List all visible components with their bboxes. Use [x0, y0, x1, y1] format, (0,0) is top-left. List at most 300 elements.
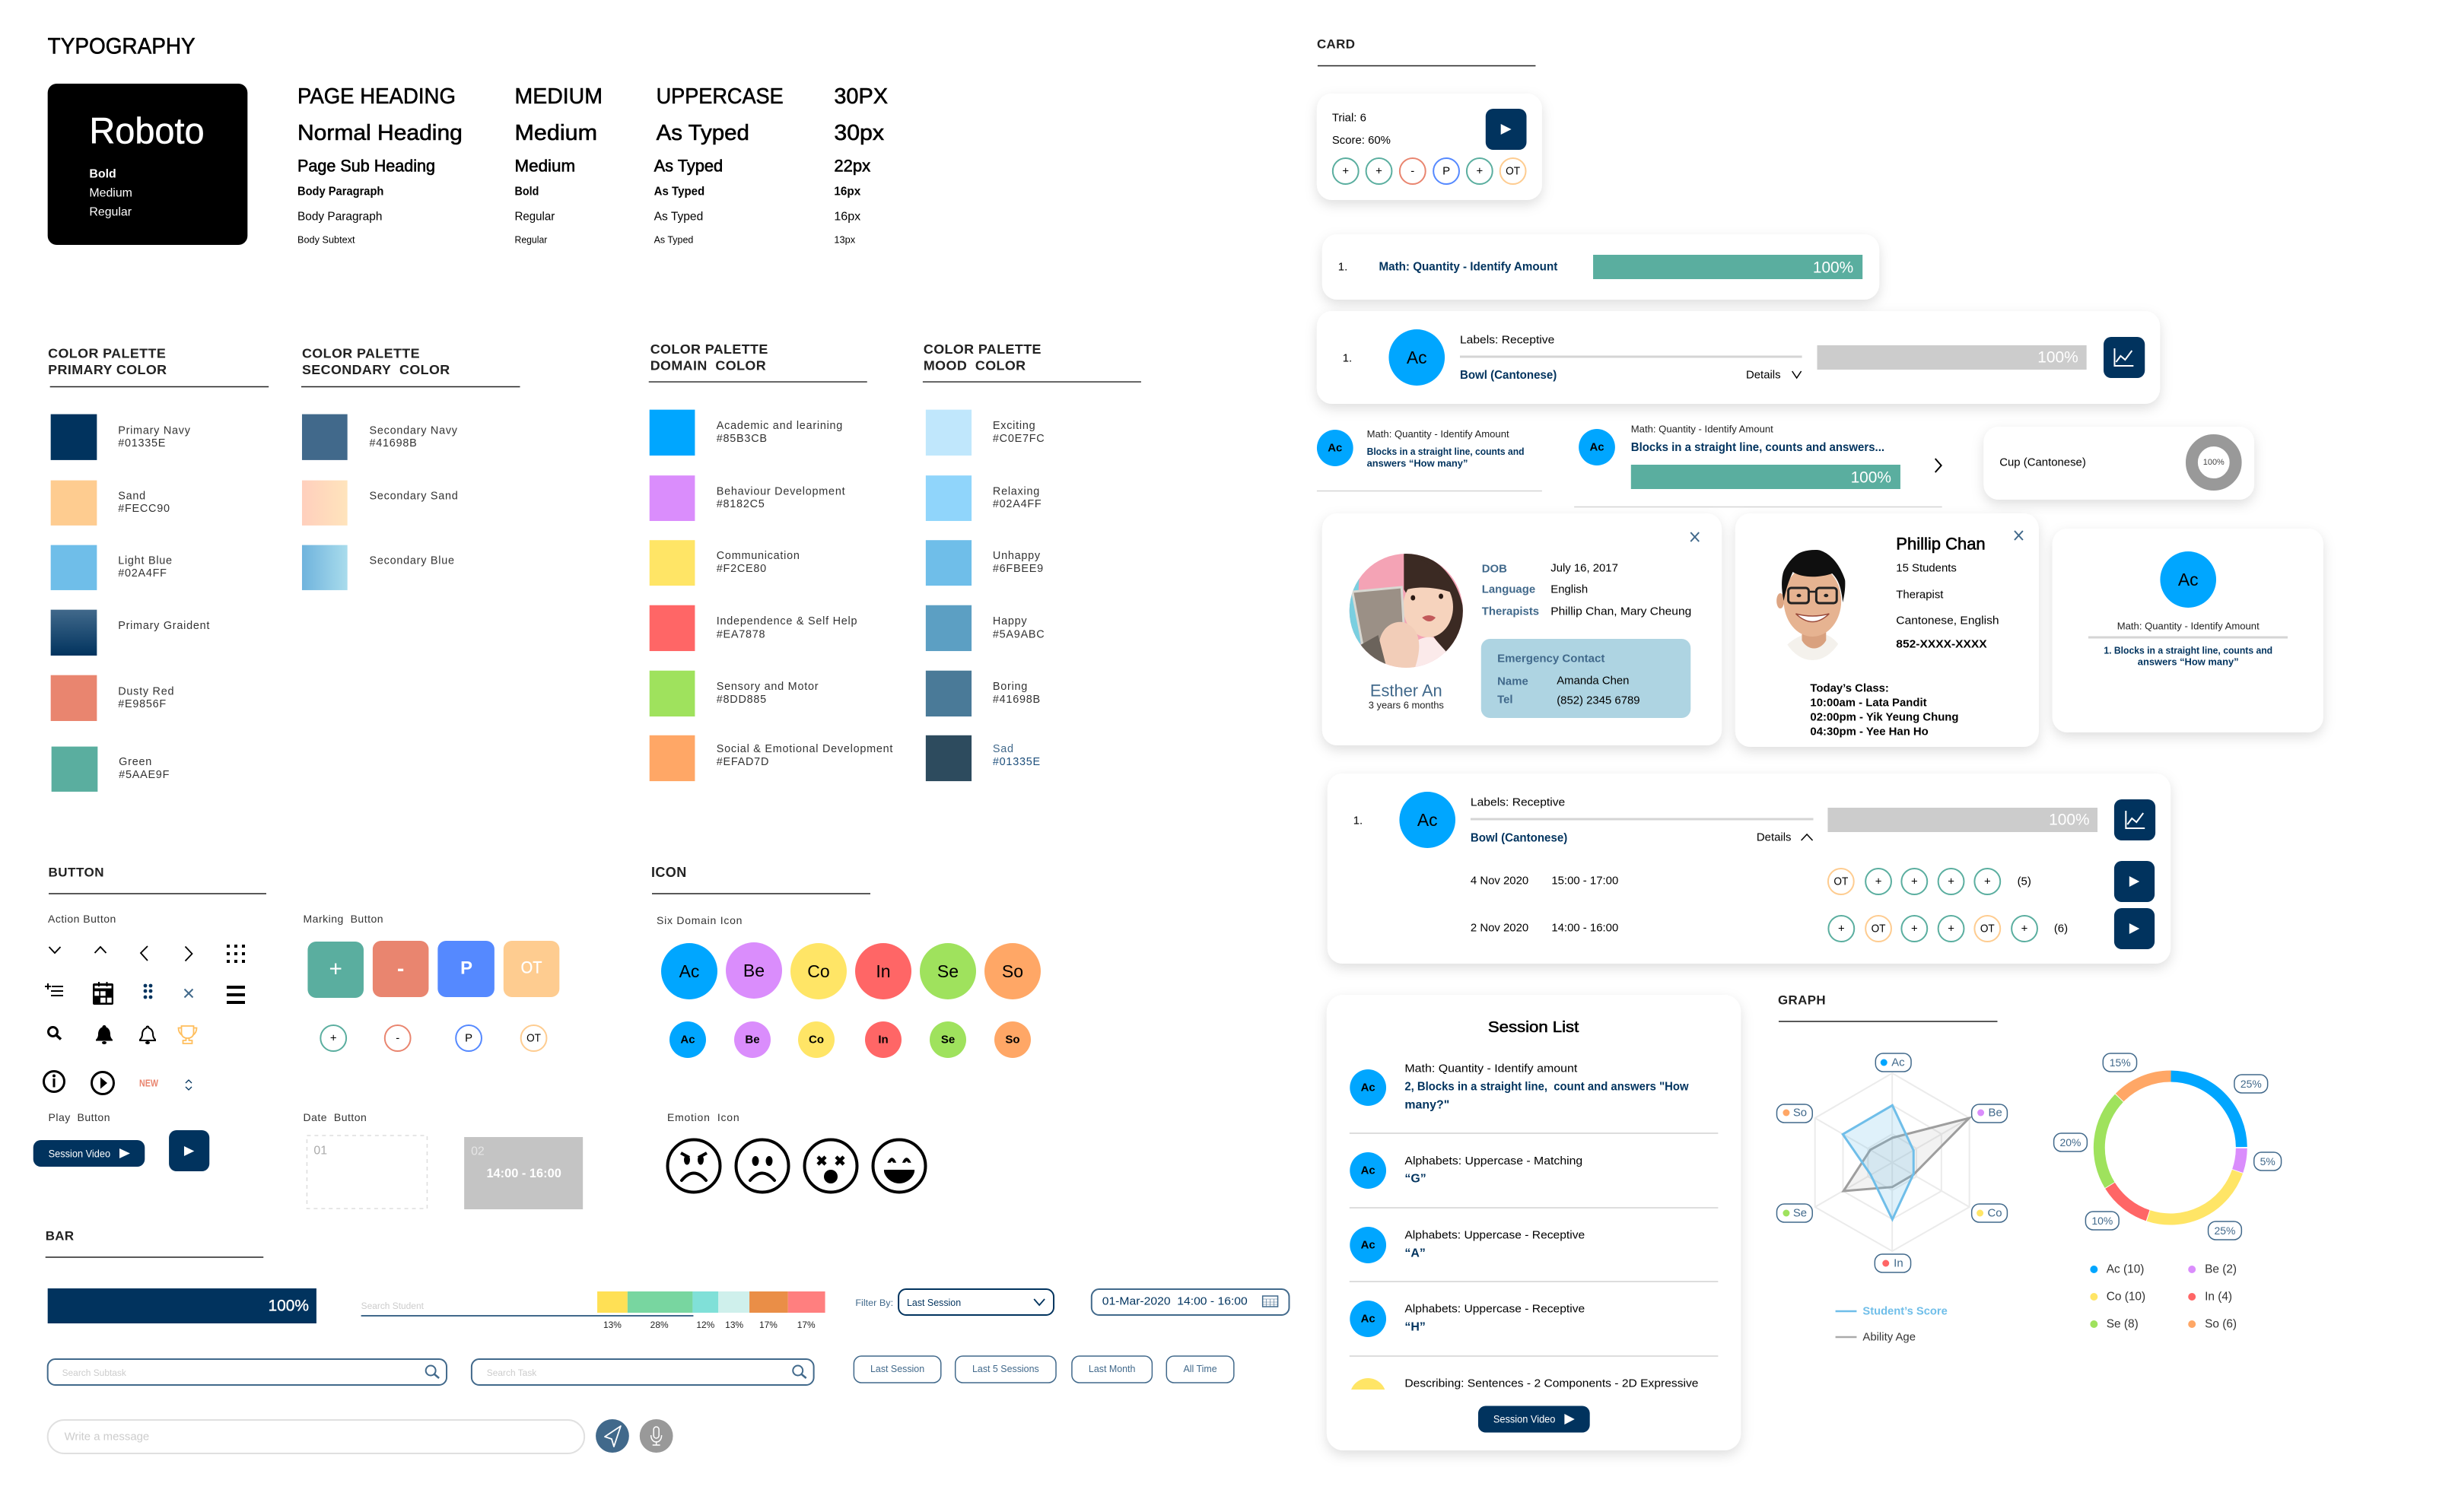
time filter pills — [854, 1356, 1234, 1383]
panel: primary colour palette: #01335E — [118, 437, 166, 449]
card: domain task vertical — [2053, 529, 2323, 732]
label: marking button: Marking Button — [303, 913, 383, 925]
marking buttons small: - — [396, 1031, 399, 1045]
session row 1: (5) — [2018, 875, 2031, 888]
session list title: Session List — [1488, 1019, 1579, 1036]
card: task progress: 1. — [1338, 260, 1347, 274]
emergency contact box: (852) 2345 6789 — [1557, 694, 1640, 707]
panel: primary colour palette: Primary Graident — [118, 620, 210, 632]
card: domain task vertical: answers “How many” — [2138, 656, 2239, 668]
emergency contact box: Name — [1497, 675, 1528, 688]
card: expanded label details: Ac — [1417, 810, 1438, 830]
date button filled — [464, 1137, 583, 1209]
domain icons small: Be — [745, 1033, 760, 1047]
marking buttons small: + — [330, 1031, 337, 1045]
type scale table: Bold — [515, 185, 539, 199]
label: action button: Action Button — [48, 913, 116, 925]
radar labels: In — [1894, 1256, 1903, 1270]
list item 3 — [1350, 1227, 1718, 1282]
section: bar — [46, 1228, 1289, 1453]
card: task item flat: answers “How many” — [1367, 457, 1468, 469]
radar labels: Ac — [1891, 1056, 1905, 1069]
today's class list — [1810, 681, 1959, 739]
panel: primary colour palette: Light Blue — [118, 554, 173, 567]
card: expanded label details: Details — [1757, 831, 1792, 844]
list item 2 — [1350, 1152, 1718, 1208]
message input — [48, 1420, 584, 1453]
panel: domain colour palette: COLOR PALETTE — [650, 341, 768, 357]
type scale table: As Typed — [654, 156, 723, 176]
stacked bar: 17% — [759, 1320, 778, 1330]
donut percentage labels: 5% — [2260, 1155, 2275, 1167]
card: task item with bar — [1574, 423, 1942, 507]
font card: Roboto — [48, 84, 247, 245]
panel: secondary colour palette: SECONDARY COLOR — [302, 362, 450, 377]
panel: mood colour palette: Boring — [993, 681, 1028, 693]
card: trial score — [1317, 94, 1542, 200]
panel: secondary colour palette: Secondary Navy — [370, 424, 458, 437]
icon: angry face — [668, 1139, 720, 1193]
domain icons small — [669, 1021, 1031, 1058]
today's class list: 02:00pm - Yik Yeung Chung — [1810, 710, 1959, 724]
radar legend: Student’s Score — [1862, 1304, 1948, 1318]
domain icons small: In — [878, 1033, 889, 1047]
search task input — [472, 1359, 814, 1385]
photo: child with phone — [1350, 554, 1463, 668]
domain icons small: So — [1005, 1033, 1020, 1047]
heading: graph: GRAPH — [1778, 993, 1826, 1008]
student details: Therapists — [1482, 605, 1539, 618]
heading: card: CARD — [1317, 37, 1355, 52]
panel: primary colour palette: Dusty Red — [118, 685, 174, 697]
panel: mood colour palette: #01335E — [993, 756, 1041, 768]
card: student profile: 3 years 6 months — [1369, 699, 1444, 711]
stacked bar: 13% — [603, 1320, 622, 1330]
icon: send button — [596, 1419, 629, 1453]
marking buttons small: P — [465, 1031, 472, 1045]
card: task progress: Math: Quantity - Identify Amount — [1379, 260, 1558, 274]
therapist details: 852-XXXX-XXXX — [1896, 637, 1987, 651]
session row 2: (6) — [2054, 922, 2068, 935]
list item 2: Alphabets: Uppercase - Matching — [1404, 1155, 1582, 1167]
domain icons large: Be — [743, 961, 765, 980]
type scale table: As Typed — [654, 185, 704, 199]
panel: mood colour palette: #5A9ABC — [993, 628, 1045, 640]
font card: Roboto: Regular — [89, 205, 132, 219]
list item 3: Alphabets: Uppercase - Receptive — [1404, 1228, 1585, 1242]
panel: mood colour palette: #02A4FF — [993, 498, 1042, 510]
time filter pills: Last Month — [1089, 1364, 1135, 1374]
label: emotion icon: Emotion Icon — [667, 1111, 739, 1123]
panel: secondary colour palette: #41698B — [370, 437, 417, 449]
marking buttons large: - — [397, 956, 404, 980]
list item 1 — [1350, 1062, 1718, 1133]
card: label progress: Labels: Receptive — [1460, 333, 1554, 347]
icon: close — [2015, 531, 2023, 540]
donut legend: Se (8) — [2107, 1317, 2139, 1331]
type scale table: 22px — [834, 156, 870, 176]
panel: domain colour palette — [649, 341, 893, 781]
stacked bar — [597, 1291, 825, 1330]
heading: typography: TYPOGRAPHY — [48, 33, 196, 59]
font card: Roboto: Medium — [89, 186, 132, 200]
icon: sort chevrons — [186, 1080, 192, 1090]
button: play square — [169, 1130, 209, 1171]
heading: button: BUTTON — [49, 866, 104, 879]
session row 2: + — [1911, 922, 1918, 935]
date button empty: 01 — [313, 1144, 327, 1158]
card: task item with bar: Blocks in a straight line, counts and answers... — [1631, 441, 1884, 454]
today's class list: 04:30pm - Yee Han Ho — [1810, 725, 1929, 739]
card: label progress: Details — [1746, 368, 1781, 382]
card: student profile — [1322, 513, 1722, 745]
panel: domain colour palette: #F2CE80 — [717, 563, 767, 575]
section: button — [33, 866, 583, 1209]
marking buttons small — [320, 1025, 546, 1051]
session row 2: + — [1838, 922, 1845, 935]
card: expanded label details — [1328, 773, 2171, 964]
icon: laughing face — [873, 1139, 925, 1193]
stacked bar: 28% — [650, 1320, 669, 1330]
heading: icon: ICON — [651, 865, 687, 880]
section: icon — [651, 865, 1041, 1193]
radar labels: So — [1793, 1106, 1807, 1120]
panel: domain colour palette: Communication — [717, 550, 800, 562]
emergency contact box: Tel — [1497, 693, 1513, 707]
list item 4: “H” — [1404, 1320, 1426, 1334]
radar chart — [1776, 1053, 2007, 1344]
marking buttons large: OT — [521, 958, 542, 977]
icon: hamburger — [227, 986, 245, 1004]
card: trial score: Score: 60% — [1332, 134, 1391, 147]
card: domain task vertical: Ac — [2178, 570, 2199, 589]
card: therapist profile — [1735, 513, 2039, 747]
student details: Language — [1482, 583, 1535, 596]
emergency contact box — [1481, 639, 1690, 718]
icon: drag handle — [144, 984, 152, 999]
today's class list: 10:00am - Lata Pandit — [1810, 696, 1927, 710]
donut legend: Be (2) — [2205, 1263, 2237, 1276]
panel: mood colour palette: MOOD COLOR — [924, 357, 1026, 373]
date button filled: 14:00 - 16:00 — [486, 1167, 561, 1180]
list item 5 clipped: Describing: Sentences - 2 Components - 2D Expressive — [1404, 1377, 1698, 1390]
panel: secondary colour palette — [301, 346, 520, 590]
list item 4: Ac — [1361, 1312, 1375, 1326]
panel: domain colour palette: Social & Emotional Development — [717, 743, 893, 755]
type scale table: Medium — [515, 156, 575, 176]
panel: domain colour palette: #8182C5 — [717, 498, 765, 510]
button: session video — [1478, 1406, 1590, 1433]
panel: primary colour palette: Primary Navy — [118, 424, 191, 437]
panel: secondary colour palette: COLOR PALETTE — [302, 346, 420, 361]
radar labels — [1776, 1053, 2007, 1272]
type scale table: Body Paragraph — [297, 210, 382, 224]
card: task progress — [1322, 234, 1879, 300]
panel: domain colour palette: DOMAIN COLOR — [650, 357, 766, 373]
donut legend — [2090, 1263, 2237, 1331]
domain icons large: In — [876, 961, 891, 981]
type scale table: MEDIUM — [515, 84, 603, 109]
date range input: 01-Mar-2020 14:00 - 16:00 — [1102, 1294, 1248, 1308]
card: expanded label details: Labels: Receptive — [1471, 796, 1565, 809]
panel: domain colour palette: Independence & Self Help — [717, 615, 857, 627]
session row 2: 2 Nov 2020 — [1471, 921, 1528, 935]
panel: primary colour palette: #E9856F — [118, 698, 167, 710]
stacked bar: 13% — [725, 1320, 743, 1330]
card: task item with bar: Ac — [1589, 440, 1604, 454]
card: label progress: Ac — [1407, 348, 1427, 367]
stacked bar: 12% — [696, 1320, 715, 1330]
card: cup donut: Cup (Cantonese) — [1999, 456, 2086, 469]
section: typography — [48, 33, 888, 246]
icon: info — [44, 1071, 64, 1092]
domain icons large — [661, 942, 1041, 999]
time filter pills: Last 5 Sessions — [972, 1364, 1039, 1374]
session row 2: OT — [1980, 922, 1995, 935]
emergency contact box: Emergency Contact — [1497, 652, 1604, 665]
type scale table: 16px — [834, 210, 860, 224]
donut percentage labels: 10% — [2091, 1215, 2113, 1227]
radar legend: Ability Age — [1862, 1330, 1916, 1344]
panel: mood colour palette: COLOR PALETTE — [924, 341, 1042, 357]
type scale table: Page Sub Heading — [297, 156, 435, 176]
panel: domain colour palette: Behaviour Development — [717, 485, 845, 497]
card: task item flat — [1317, 428, 1542, 491]
list item 2: “G” — [1404, 1172, 1426, 1186]
date button filled: 02 — [471, 1145, 485, 1158]
card: trial score: P — [1442, 164, 1450, 178]
marking buttons large: P — [460, 958, 472, 979]
label: play button: Play Button — [49, 1111, 110, 1123]
card: label progress: Bowl (Cantonese) — [1460, 369, 1557, 382]
session row 1 — [1471, 861, 2155, 902]
card: cup donut: 100% — [2203, 458, 2225, 467]
type scale table: Body Paragraph — [297, 185, 383, 199]
icon: shocked face — [805, 1139, 857, 1193]
session row 1: + — [1911, 875, 1918, 888]
type scale table: As Typed — [654, 233, 693, 246]
card: trial score: + — [1342, 164, 1349, 178]
font card: Roboto: Roboto — [89, 111, 205, 152]
photo: therapist portrait — [1776, 550, 1846, 660]
domain icons large: Ac — [679, 961, 699, 981]
donut percentage labels: 20% — [2060, 1136, 2081, 1148]
type scale table: Medium — [515, 121, 597, 145]
search subtask input: Search Subtask — [62, 1367, 126, 1378]
card: label progress: 1. — [1343, 351, 1352, 365]
donut percentage labels: 15% — [2110, 1056, 2131, 1069]
card: domain task vertical: Math: Quantity - Identify Amount — [2117, 620, 2260, 632]
search task input: Search Task — [487, 1367, 536, 1378]
card: trial score: - — [1410, 164, 1414, 178]
donut legend: So (6) — [2205, 1317, 2237, 1331]
panel: primary colour palette: PRIMARY COLOR — [48, 362, 167, 377]
card: trial score: OT — [1506, 164, 1520, 178]
card: cup donut — [1983, 427, 2254, 500]
student name: Esther An — [1370, 681, 1442, 700]
domain icons small: Ac — [680, 1033, 695, 1047]
panel: primary colour palette: Green — [119, 756, 152, 768]
search subtask input — [48, 1359, 447, 1385]
type scale table: Regular — [515, 233, 548, 246]
icon: outline bell — [140, 1027, 155, 1044]
card: label progress: 100% — [2037, 348, 2078, 367]
type scale table: 30PX — [834, 84, 888, 109]
therapist details: Therapist — [1896, 588, 1944, 602]
type scale table: As Typed — [657, 121, 749, 145]
card: task progress: 100% — [1813, 259, 1853, 277]
therapist name: Phillip Chan — [1896, 534, 1986, 554]
search student field: Search Student — [361, 1301, 425, 1311]
session row 1: 15:00 - 17:00 — [1551, 874, 1618, 888]
filter select: Last Session — [907, 1298, 961, 1308]
panel: domain colour palette: #8DD885 — [717, 694, 767, 706]
type scale table: 30px — [834, 121, 885, 145]
panel: secondary colour palette: Secondary Sand — [370, 490, 459, 502]
radar labels: Co — [1988, 1206, 2002, 1220]
list item 3: Ac — [1361, 1238, 1375, 1252]
icon: trophy — [178, 1026, 196, 1043]
icon: nine dot grid — [227, 945, 245, 963]
list item 2: Ac — [1361, 1164, 1375, 1177]
radar labels: Be — [1989, 1106, 2002, 1120]
type scale table: As Typed — [654, 210, 703, 224]
time filter pills: Last Session — [870, 1364, 924, 1374]
card: task item flat: Blocks in a straight line, counts and — [1367, 446, 1525, 457]
list item 1: 2, Blocks in a straight line, count and answers "How — [1404, 1080, 1689, 1094]
session row 1: + — [1984, 875, 1991, 888]
domain icons large: Co — [807, 961, 830, 981]
progress bar navy — [48, 1288, 316, 1323]
marking buttons small: OT — [526, 1031, 541, 1045]
list item 1: Ac — [1361, 1081, 1375, 1094]
therapist details: Cantonese, English — [1896, 614, 1999, 627]
today's class list: Today’s Class: — [1810, 681, 1889, 695]
panel: mood colour palette: Unhappy — [993, 550, 1041, 562]
domain icons large: So — [1002, 961, 1023, 981]
card: trial score: + — [1476, 164, 1483, 178]
panel: domain colour palette: Sensory and Motor — [717, 681, 819, 693]
donut percentage labels: 25% — [2241, 1078, 2262, 1090]
card: expanded label details: Bowl (Cantonese) — [1471, 831, 1567, 845]
list item 1: many?" — [1404, 1098, 1449, 1112]
domain icons small: Co — [809, 1033, 824, 1047]
card: task item with bar: 100% — [1851, 469, 1891, 487]
panel: mood colour palette: #C0E7FC — [993, 433, 1045, 445]
student details: DOB — [1482, 562, 1507, 576]
panel: primary colour palette: Sand — [118, 490, 146, 502]
button: session video: Session Video — [49, 1148, 110, 1160]
type scale table: UPPERCASE — [657, 84, 784, 109]
donut legend: Ac (10) — [2107, 1263, 2144, 1276]
therapist details: 15 Students — [1896, 561, 1957, 575]
card: trial score: + — [1375, 164, 1382, 178]
font card: Roboto: Bold — [89, 167, 116, 181]
session row 1: 4 Nov 2020 — [1471, 874, 1528, 888]
panel: secondary colour palette: Secondary Blue — [370, 554, 455, 567]
student details — [1482, 561, 1691, 618]
type scale table — [297, 84, 888, 246]
marking buttons large — [307, 941, 559, 998]
label: six domain icon: Six Domain Icon — [657, 914, 743, 926]
card: trial score: Trial: 6 — [1332, 111, 1366, 125]
session row 2: OT — [1872, 922, 1886, 935]
list item 4 — [1350, 1301, 1718, 1356]
card: domain task vertical: 1. Blocks in a straight line, counts and — [2104, 644, 2272, 656]
marking buttons large: + — [329, 956, 342, 982]
button: session video: Session Video — [1493, 1413, 1555, 1425]
date range input — [1092, 1289, 1289, 1315]
icon: add list — [45, 983, 63, 996]
donut percentage labels — [2054, 1053, 2282, 1240]
icon: filled bell — [96, 1025, 113, 1044]
panel: mood colour palette: Exciting — [993, 420, 1035, 432]
session row 2 — [1471, 908, 2155, 949]
therapist details — [1896, 561, 1999, 651]
emergency contact box: Amanda Chen — [1557, 674, 1629, 688]
panel: domain colour palette: #85B3CB — [717, 433, 768, 445]
panel: primary colour palette: COLOR PALETTE — [48, 346, 166, 361]
button: session video — [33, 1140, 145, 1167]
student details: English — [1550, 583, 1588, 596]
date button empty — [307, 1136, 427, 1209]
panel: mood colour palette: #41698B — [993, 694, 1041, 706]
session row 1: + — [1875, 875, 1881, 888]
icon: play circle — [91, 1072, 114, 1094]
panel: domain colour palette: Academic and learining — [717, 420, 843, 432]
icon: close — [184, 989, 193, 998]
session row 1: + — [1948, 875, 1954, 888]
card: task item flat: Math: Quantity - Identify Amount — [1367, 428, 1509, 440]
type scale table: Normal Heading — [297, 121, 463, 145]
heading: bar: BAR — [46, 1228, 75, 1244]
domain icons small: Se — [941, 1033, 955, 1047]
panel: domain colour palette: #EFAD7D — [717, 756, 769, 768]
panel: primary colour palette: #5AAE9F — [119, 769, 170, 781]
icon: new badge: NEW — [139, 1077, 159, 1089]
card: task item flat: Ac — [1328, 441, 1342, 455]
session row 2: 14:00 - 16:00 — [1551, 921, 1618, 935]
type scale table: PAGE HEADING — [297, 84, 456, 109]
donut legend: In (4) — [2205, 1290, 2232, 1304]
panel: primary colour palette — [48, 346, 269, 792]
filter select: Filter By: — [855, 1298, 893, 1308]
icon: mic button — [640, 1419, 673, 1453]
type scale table: Regular — [515, 210, 555, 224]
progress bar navy: 100% — [269, 1297, 309, 1315]
radar legend — [1836, 1304, 1948, 1344]
panel: mood colour palette — [923, 341, 1141, 781]
session row 2: + — [1948, 922, 1954, 935]
list item 1: Math: Quantity - Identify amount — [1404, 1062, 1578, 1075]
list item 4: Alphabets: Uppercase - Receptive — [1404, 1302, 1585, 1316]
stacked bar: 17% — [797, 1320, 816, 1330]
card: session list — [1327, 995, 1741, 1450]
panel: primary colour palette: #02A4FF — [118, 567, 167, 580]
donut percentage labels: 25% — [2215, 1225, 2235, 1237]
time filter pills: All Time — [1183, 1364, 1217, 1374]
panel: primary colour palette: #FECC90 — [118, 503, 170, 515]
card: label progress — [1317, 311, 2160, 404]
type scale table: Body Subtext — [297, 233, 355, 246]
card: expanded label details: 1. — [1353, 814, 1363, 827]
icon: sad face — [736, 1139, 788, 1193]
message input: Write a message — [65, 1430, 149, 1444]
panel: mood colour palette: Relaxing — [993, 485, 1040, 497]
icon: calendar — [93, 982, 113, 1005]
panel: mood colour palette: Happy — [993, 615, 1027, 627]
icon: close — [1690, 532, 1699, 542]
